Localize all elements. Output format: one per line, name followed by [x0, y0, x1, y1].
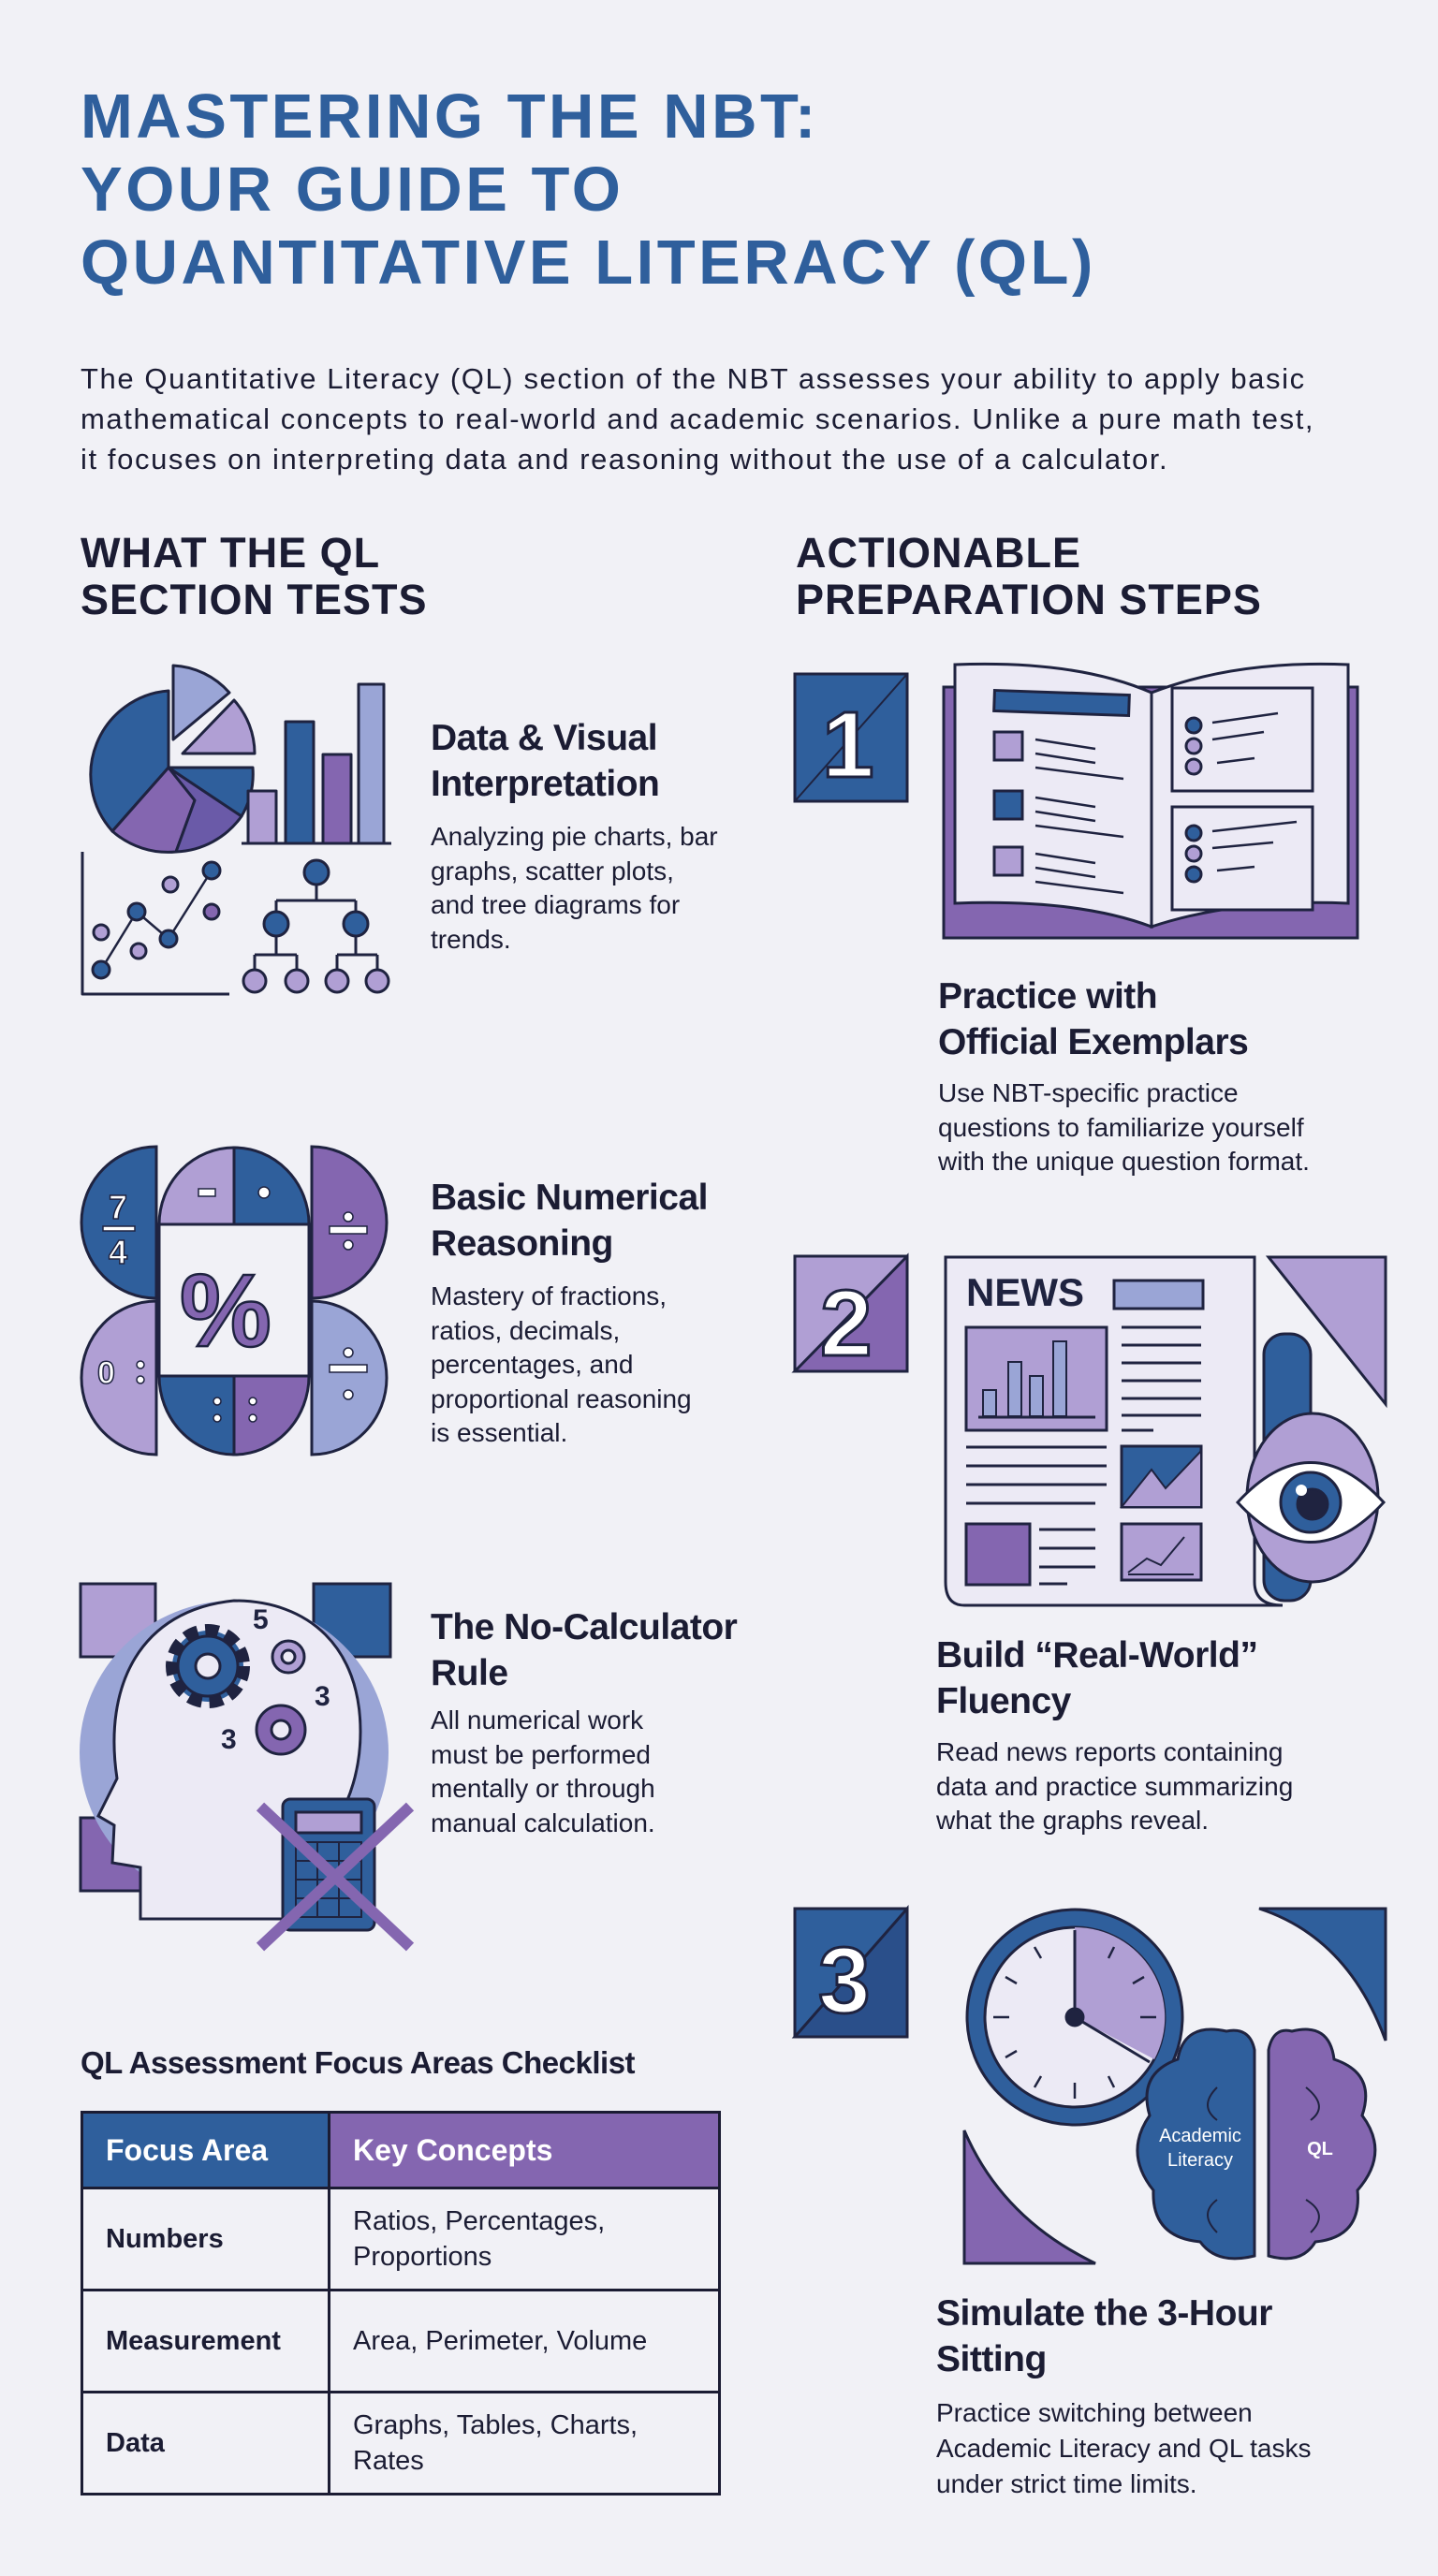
text: no-calculator rule: manual calculation.: [431, 1808, 655, 1837]
icon: no-calculator head: [79, 1582, 414, 1951]
section heading: actionable preparation steps: PREPARATION STEPS: [796, 576, 1262, 623]
title: [81, 81, 1096, 298]
text: step 1: Practice with: [938, 976, 1157, 1017]
section heading: actionable preparation steps: ACTIONABLE: [796, 529, 1081, 577]
intro paragraph: [81, 362, 1314, 476]
title: MASTERING THE NBT:: [81, 81, 819, 152]
table: focus areas: Proportions: [353, 2242, 492, 2272]
title: QUANTITATIVE LITERACY (QL): [81, 227, 1096, 298]
text: Literacy: [1167, 2150, 1233, 2171]
text: step 3: [936, 2293, 1311, 2498]
text: no-calculator rule: must be performed: [431, 1739, 651, 1769]
section heading: what the QL section tests: WHAT THE QL: [81, 529, 380, 577]
text: step 1: with the unique question format.: [938, 1147, 1310, 1176]
section heading: what the QL section tests: [81, 529, 428, 623]
text: step 2: Fluency: [936, 1681, 1071, 1721]
text: basic numerical reasoning: Reasoning: [431, 1223, 613, 1264]
text: 5: [253, 1604, 269, 1635]
table: focus areas: Measurement: [106, 2326, 281, 2356]
text: 3: [315, 1681, 330, 1712]
text: step 2: data and practice summarizing: [936, 1771, 1293, 1801]
text: data & visual interpretation: [431, 718, 718, 953]
text: basic numerical reasoning: proportional reasoning: [431, 1383, 692, 1413]
section heading: actionable preparation steps: [796, 529, 1262, 623]
section heading: what the QL section tests: SECTION TESTS: [81, 576, 428, 623]
text: no-calculator rule: mentally or through: [431, 1774, 655, 1803]
text: 3: [818, 1928, 871, 2033]
text: step 1: Official Exemplars: [938, 1022, 1248, 1062]
text: step 2: Build “Real-World”: [936, 1635, 1257, 1676]
text: NEWS: [966, 1270, 1084, 1314]
text: no-calculator rule: All numerical work: [431, 1705, 643, 1734]
table: focus areas: Data: [106, 2428, 165, 2458]
text: step 3: Academic Literacy and QL tasks: [936, 2434, 1311, 2463]
text: 2: [820, 1271, 873, 1376]
text: step 3: Simulate the 3-Hour: [936, 2293, 1272, 2334]
text: data & visual interpretation: graphs, scatter plots,: [431, 856, 674, 886]
title: YOUR GUIDE TO: [81, 154, 624, 225]
text: data & visual interpretation: trends.: [431, 925, 511, 953]
text: QL: [1307, 2139, 1333, 2159]
text: step 2: [936, 1635, 1293, 1835]
intro paragraph: it focuses on interpreting data and reasoning without the use of a calculator.: [81, 443, 1168, 476]
text: step 1: Use NBT-specific practice: [938, 1078, 1239, 1107]
text: basic numerical reasoning: percentages, and: [431, 1350, 633, 1379]
table: focus areas: [81, 2111, 721, 2496]
table: focus areas: Numbers: [106, 2224, 224, 2254]
text: 0: [97, 1355, 115, 1391]
checklist heading: QL Assessment Focus Areas Checklist: [81, 2045, 635, 2080]
icon: numerical reasoning: [81, 1146, 388, 1456]
text: step 1: questions to familiarize yourself: [938, 1112, 1304, 1142]
text: data & visual interpretation: Interpretation: [431, 764, 659, 804]
text: step 2: what the graphs reveal.: [936, 1806, 1209, 1835]
table: focus areas: Focus Area: [106, 2132, 268, 2166]
text: data & visual interpretation: Analyzing pie charts, bar: [431, 822, 718, 851]
text: no-calculator rule: Rule: [431, 1653, 508, 1693]
icon: open book: [942, 663, 1359, 940]
text: %: [180, 1253, 271, 1368]
text: 3: [221, 1724, 237, 1755]
text: 7: [109, 1188, 127, 1226]
text: no-calculator rule: [431, 1607, 738, 1837]
icon: newspaper with eye: [944, 1256, 1387, 1606]
text: basic numerical reasoning: is essential.: [431, 1418, 567, 1447]
text: basic numerical reasoning: Basic Numerical: [431, 1178, 708, 1218]
text: step 3: under strict time limits.: [936, 2469, 1196, 2498]
intro paragraph: The Quantitative Literacy (QL) section of the NBT assesses your ability to apply basic: [81, 362, 1306, 395]
table: focus areas: Graphs, Tables, Charts,: [353, 2410, 638, 2440]
intro paragraph: mathematical concepts to real-world and academic scenarios. Unlike a pure math test,: [81, 402, 1314, 435]
table: focus areas: Area, Perimeter, Volume: [353, 2326, 647, 2356]
text: 4: [109, 1233, 127, 1271]
step number badges: [792, 672, 908, 2039]
text: data & visual interpretation: Data & Visual: [431, 718, 657, 758]
text: data & visual interpretation: and tree diagrams for: [431, 890, 680, 919]
text: step 3: Sitting: [936, 2339, 1047, 2379]
table: focus areas: Rates: [353, 2446, 424, 2476]
table: focus areas: Key Concepts: [353, 2132, 552, 2166]
text: step 2: Read news reports containing: [936, 1737, 1283, 1766]
text: step 1: [938, 976, 1310, 1176]
table: focus areas: Ratios, Percentages,: [353, 2206, 605, 2236]
text: step 3: Practice switching between: [936, 2398, 1253, 2427]
icon: clock and brain: [962, 1908, 1387, 2265]
text: basic numerical reasoning: ratios, decimals,: [431, 1316, 620, 1344]
text: basic numerical reasoning: Mastery of fractions,: [431, 1281, 667, 1310]
text: 1: [822, 693, 874, 798]
text: no-calculator rule: The No-Calculator: [431, 1607, 737, 1647]
text: basic numerical reasoning: [431, 1178, 708, 1447]
icon: data charts: [81, 665, 391, 996]
text: Academic: [1159, 2126, 1241, 2146]
